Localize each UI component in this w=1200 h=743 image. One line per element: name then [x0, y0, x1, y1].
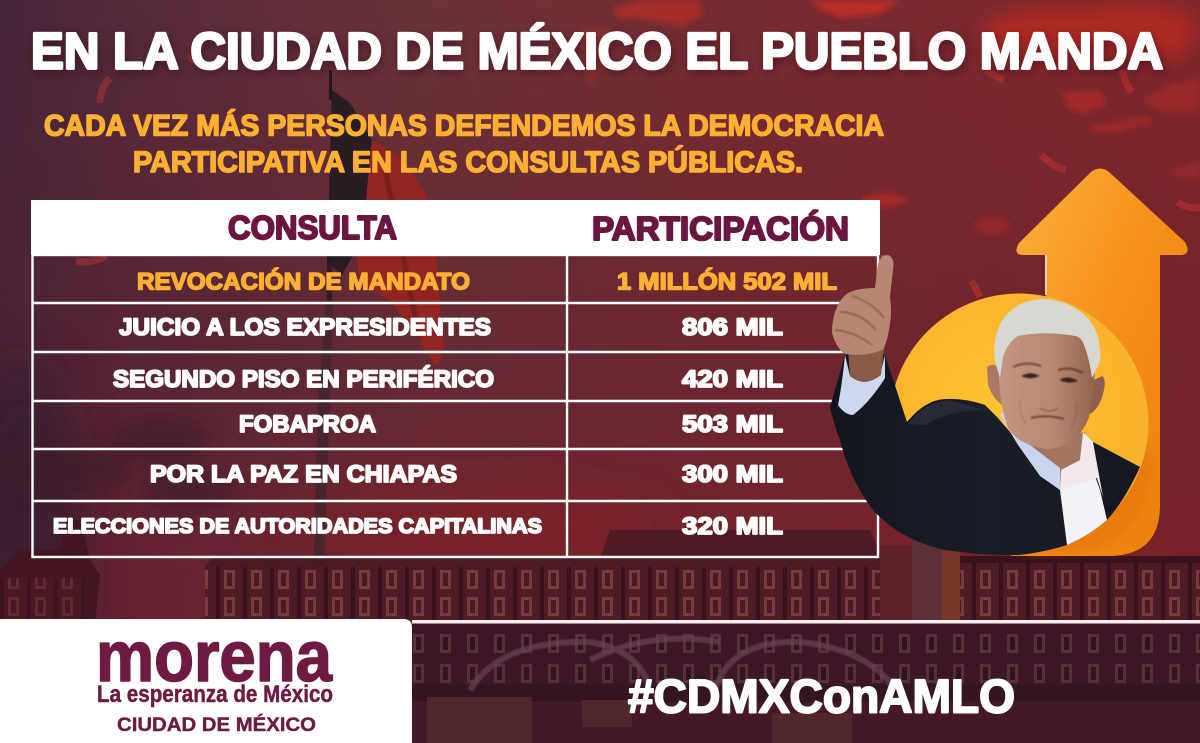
icon: orange up arrow	[1010, 168, 1188, 556]
wrist	[848, 347, 884, 382]
hand thumbs up	[832, 255, 893, 355]
row: Por la paz en Chiapas	[150, 461, 783, 488]
ear left	[987, 365, 1002, 405]
row: Revocación de mandato: REVOCACIÓN DE MANDATO	[137, 268, 470, 296]
table grid	[32, 255, 879, 557]
hair	[994, 299, 1100, 378]
panel: morena logo: La esperanza de México	[97, 681, 333, 708]
icon: yellow circle	[890, 294, 1148, 552]
row: Juicio a los expresidentes: 806 MIL	[682, 314, 783, 341]
row: Fobaproa: FOBAPROA	[239, 411, 376, 438]
face	[999, 328, 1094, 449]
flag on pole	[312, 70, 444, 622]
table header: PARTICIPACIÓN	[592, 210, 849, 247]
photo: man giving thumbs up	[830, 255, 1140, 555]
shirt	[1060, 470, 1107, 545]
row: Revocación de mandato: 1 MILLÓN 502 MIL	[617, 268, 837, 296]
row: Fobaproa: 503 MIL	[682, 411, 783, 438]
panel: morena logo	[0, 618, 412, 743]
title: EN LA CIUDAD DE MÉXICO EL PUEBLO MANDA	[32, 26, 1165, 83]
shoulder highlight	[908, 400, 985, 425]
finger lines	[835, 257, 892, 345]
subtitle: PARTICIPATIVA EN LAS CONSULTAS PÚBLICAS.	[133, 145, 803, 179]
jacket	[830, 355, 1140, 555]
panel: morena logo: morena	[96, 618, 332, 697]
divider line	[412, 620, 1200, 624]
panel: morena logo: CIUDAD DE MÉXICO	[117, 714, 316, 736]
table	[31, 200, 880, 557]
shirt collar right	[1060, 432, 1103, 497]
subtitle: CADA VEZ MÁS PERSONAS DEFENDEMOS LA DEMOCRACIA	[44, 108, 884, 142]
skyline: Zócalo buildings	[0, 520, 1200, 743]
shirt collar left	[1000, 408, 1060, 490]
row: Revocación de mandato	[137, 268, 837, 296]
table header	[31, 200, 880, 255]
table header: CONSULTA	[228, 209, 397, 246]
trees behind table	[0, 416, 240, 512]
subtitle	[44, 108, 884, 179]
neck	[1005, 420, 1092, 487]
row: Segundo piso en periférico	[113, 365, 783, 393]
shirt cuff	[838, 355, 885, 415]
row: Por la paz en Chiapas: 300 MIL	[682, 461, 783, 488]
ear right	[1090, 376, 1105, 414]
hashtag: #CDMXConAMLO	[628, 670, 1015, 722]
row: Elecciones de autoridades capitalinas: 320 MIL	[682, 513, 783, 540]
row: Fobaproa	[239, 411, 783, 438]
row: Juicio a los expresidentes: JUICIO A LOS EXPRESIDENTES	[119, 314, 491, 341]
title: EN LA CIUDAD DE MÉXICO EL PUEBLO MANDA	[31, 22, 1163, 80]
row: Segundo piso en periférico: 420 MIL	[682, 366, 783, 393]
facial features	[1013, 364, 1083, 428]
row: Elecciones de autoridades capitalinas: ELECCIONES DE AUTORIDADES CAPITALINAS	[53, 515, 542, 538]
row: Elecciones de autoridades capitalinas	[53, 513, 783, 540]
row: Por la paz en Chiapas: POR LA PAZ EN CHIAPAS	[150, 461, 457, 488]
row: Segundo piso en periférico: SEGUNDO PISO EN PERIFÉRICO	[113, 365, 494, 393]
row: Juicio a los expresidentes	[119, 314, 783, 341]
